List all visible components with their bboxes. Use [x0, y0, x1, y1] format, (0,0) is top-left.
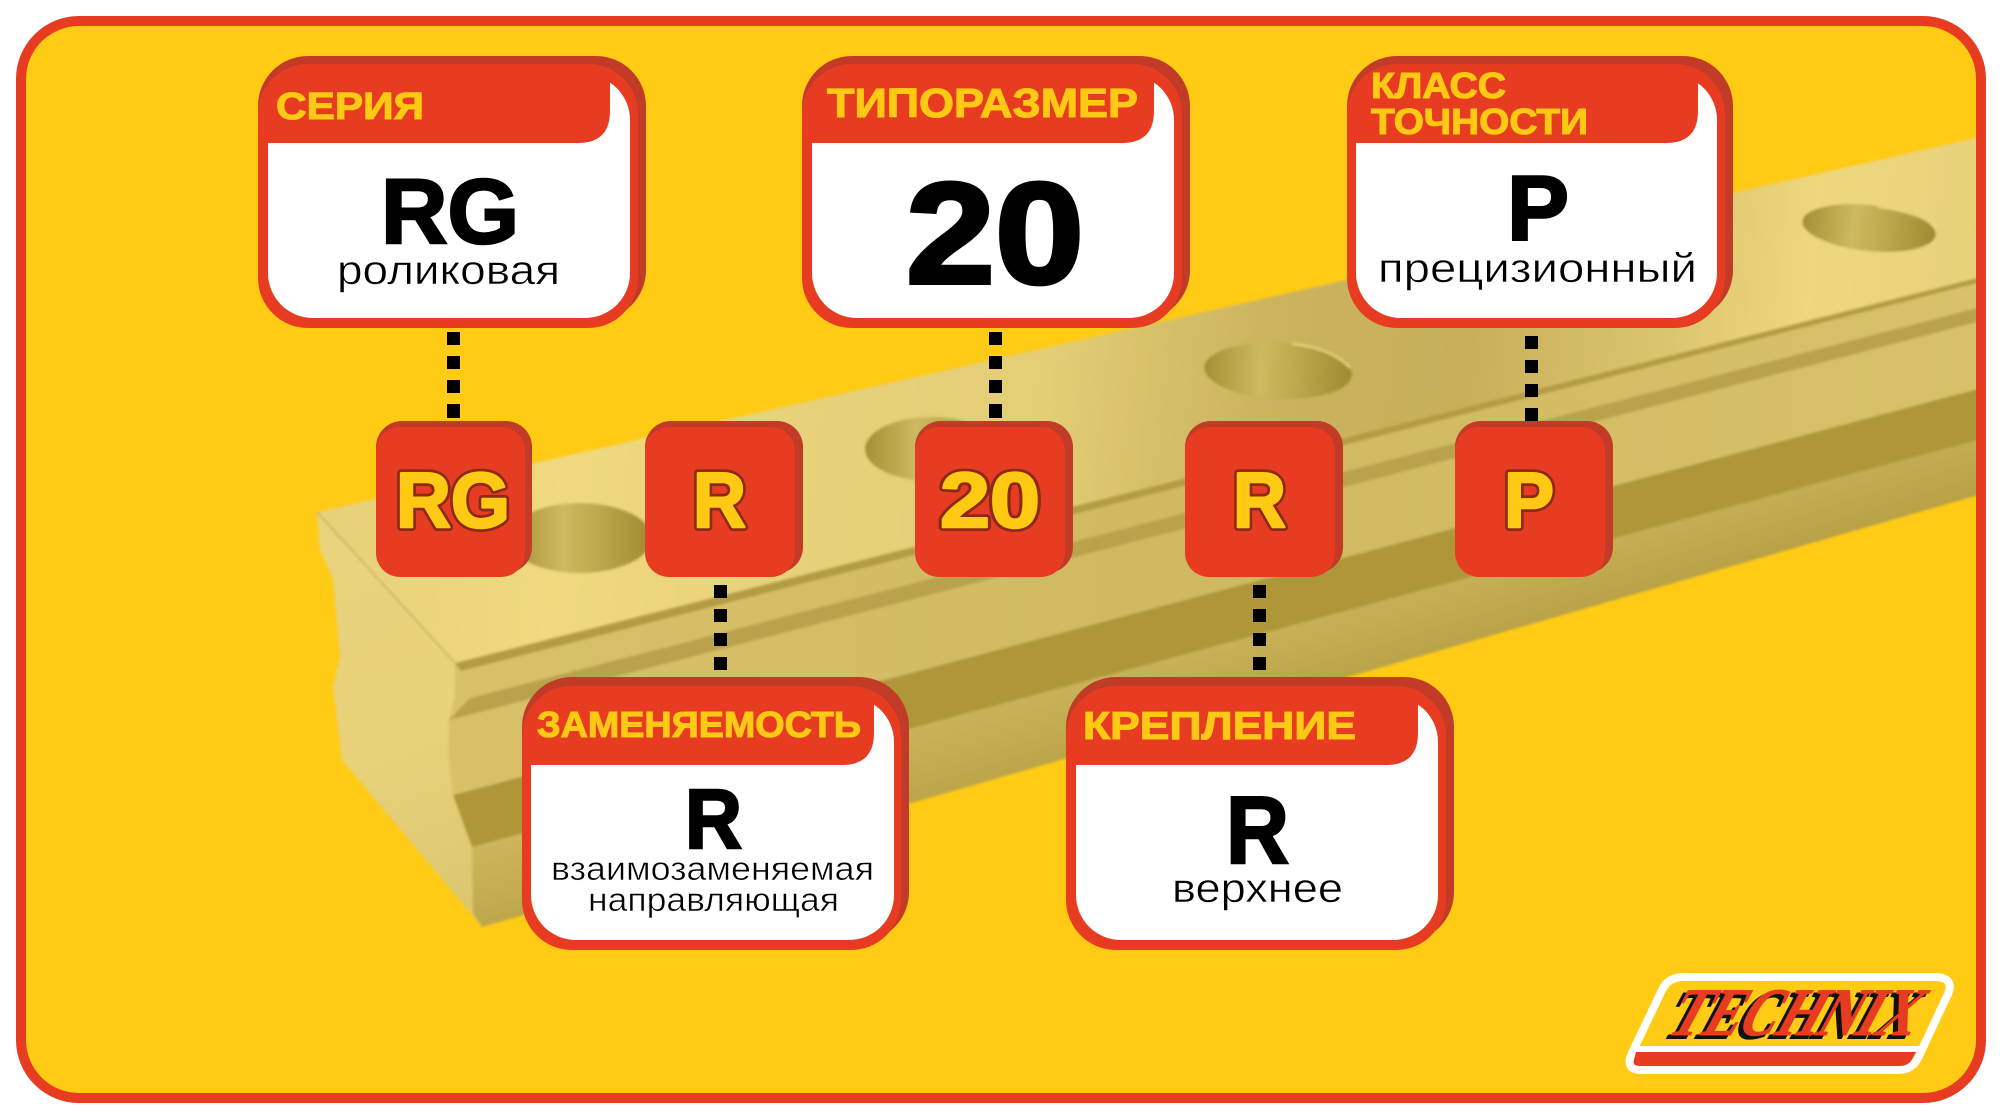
- code tile: 20: 20: [940, 456, 1040, 544]
- logo: TECHNIX: TECHNIX: [1651, 977, 1937, 1053]
- illustration: linear guide rail: [317, 136, 1985, 927]
- panel: interchangeability card: взаимозаменяемая: [551, 850, 874, 887]
- code tile: R mounting: R: [1233, 456, 1286, 544]
- logo: TECHNIX: [1630, 974, 1950, 1070]
- panel: interchangeability card: [522, 677, 909, 950]
- dotted connector: interchangeability: [714, 585, 727, 670]
- code tile: 20: [915, 421, 1073, 577]
- panel: series card: RG: [381, 161, 519, 263]
- panel: size card: [802, 56, 1190, 328]
- code tile: R mounting: [1185, 421, 1343, 577]
- code tile: R interchangeability: R: [693, 456, 746, 544]
- panel: mounting card: [1066, 677, 1454, 950]
- code tile: RG: RG: [396, 456, 510, 544]
- panel: interchangeability card: ЗАМЕНЯЕМОСТЬ: [537, 704, 861, 745]
- code tile: 20: 20: [940, 456, 1040, 544]
- code tile: P: [1455, 421, 1613, 577]
- dotted connector: series: [447, 332, 460, 418]
- code tile: R interchangeability: [645, 421, 803, 577]
- panel: series card: роликовая: [337, 247, 560, 293]
- panel: size card: 20: [906, 153, 1084, 314]
- dotted connector: size: [989, 332, 1002, 418]
- code tile: P: P: [1504, 456, 1554, 544]
- panel: precision class card: КЛАСС: [1371, 65, 1506, 106]
- code tile: RG: RG: [396, 456, 510, 544]
- dotted connector: mounting: [1253, 585, 1266, 670]
- panel: series card: [258, 56, 646, 328]
- panel: mounting card: верхнее: [1172, 865, 1343, 911]
- code tile: R interchangeability: R: [693, 456, 746, 544]
- panel: size card: ТИПОРАЗМЕР: [827, 80, 1138, 126]
- panel: interchangeability card: R: [685, 772, 742, 866]
- code tile: RG: [376, 421, 532, 577]
- panel: mounting card: R: [1226, 777, 1289, 884]
- panel: precision class card: ТОЧНОСТИ: [1371, 101, 1588, 142]
- panel: precision class card: прецизионный: [1378, 245, 1697, 291]
- panel: precision class card: P: [1507, 158, 1569, 260]
- code tile: R mounting: R: [1233, 456, 1286, 544]
- panel: precision class card: [1347, 56, 1733, 328]
- code tile: P: P: [1504, 456, 1554, 544]
- panel: series card: СЕРИЯ: [276, 86, 424, 128]
- panel: mounting card: КРЕПЛЕНИЕ: [1083, 705, 1356, 748]
- panel: interchangeability card: направляющая: [588, 881, 839, 918]
- dotted connector: precision: [1525, 336, 1538, 422]
